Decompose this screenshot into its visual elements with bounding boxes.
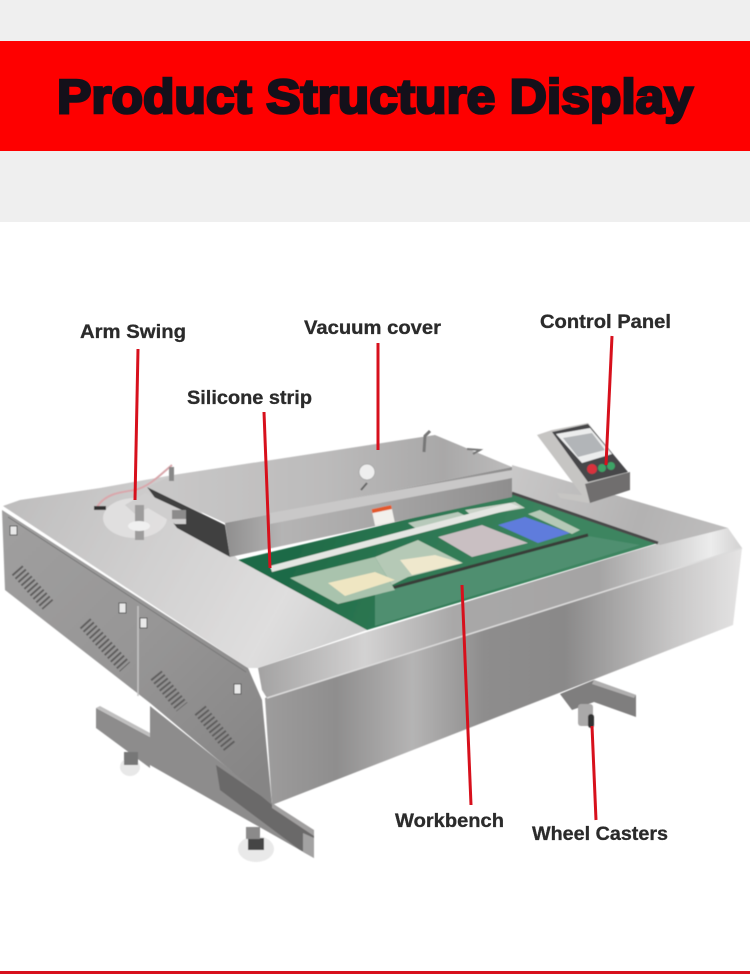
pointer: arm swing bbox=[135, 349, 138, 500]
silicone strip bbox=[270, 503, 520, 572]
bottom red rule bbox=[0, 971, 750, 974]
base block and left legs bbox=[96, 706, 314, 862]
title banner bbox=[0, 41, 750, 151]
screws bbox=[10, 526, 241, 694]
label: wheel casters: Wheel Casters bbox=[532, 824, 668, 845]
left side panels bbox=[2, 510, 272, 805]
cover handle bbox=[424, 431, 430, 452]
pointer: vacuum cover bbox=[376, 343, 380, 450]
table top bbox=[3, 475, 367, 668]
title: Product Structure Display bbox=[57, 71, 693, 124]
control panel bbox=[537, 423, 630, 503]
swing arm bbox=[94, 465, 186, 540]
label: vacuum cover: Vacuum cover bbox=[304, 318, 442, 339]
label: silicone strip: Silicone strip bbox=[187, 388, 312, 409]
label: control panel: Control Panel bbox=[540, 312, 671, 333]
label: workbench: Workbench bbox=[395, 811, 504, 832]
pointer: workbench bbox=[462, 585, 471, 805]
front face bbox=[265, 548, 742, 805]
gauge bbox=[359, 464, 375, 490]
machine illustration bbox=[2, 423, 742, 862]
front upper band bbox=[258, 528, 742, 698]
warning label bbox=[372, 505, 395, 526]
lower green strip bbox=[375, 536, 640, 626]
front leg bar bbox=[216, 765, 314, 858]
pointer: silicone strip bbox=[264, 412, 270, 568]
bags bbox=[290, 502, 580, 604]
rear caster bbox=[578, 704, 594, 728]
green work surface bbox=[238, 493, 658, 630]
rear right leg bbox=[560, 680, 636, 728]
rear left foot bbox=[120, 752, 140, 776]
top grey band bbox=[0, 0, 750, 222]
table top right bbox=[512, 465, 728, 545]
vacuum cover bbox=[147, 431, 512, 557]
front foot bbox=[238, 827, 274, 862]
rice bbox=[328, 572, 395, 596]
label: arm swing: Arm Swing bbox=[80, 322, 186, 343]
rear left leg bbox=[96, 708, 150, 768]
buttons bbox=[587, 462, 615, 474]
screen bbox=[563, 433, 605, 457]
pointer: control panel bbox=[606, 336, 612, 465]
pointer: wheel casters bbox=[592, 726, 596, 820]
vents bbox=[17, 570, 230, 747]
